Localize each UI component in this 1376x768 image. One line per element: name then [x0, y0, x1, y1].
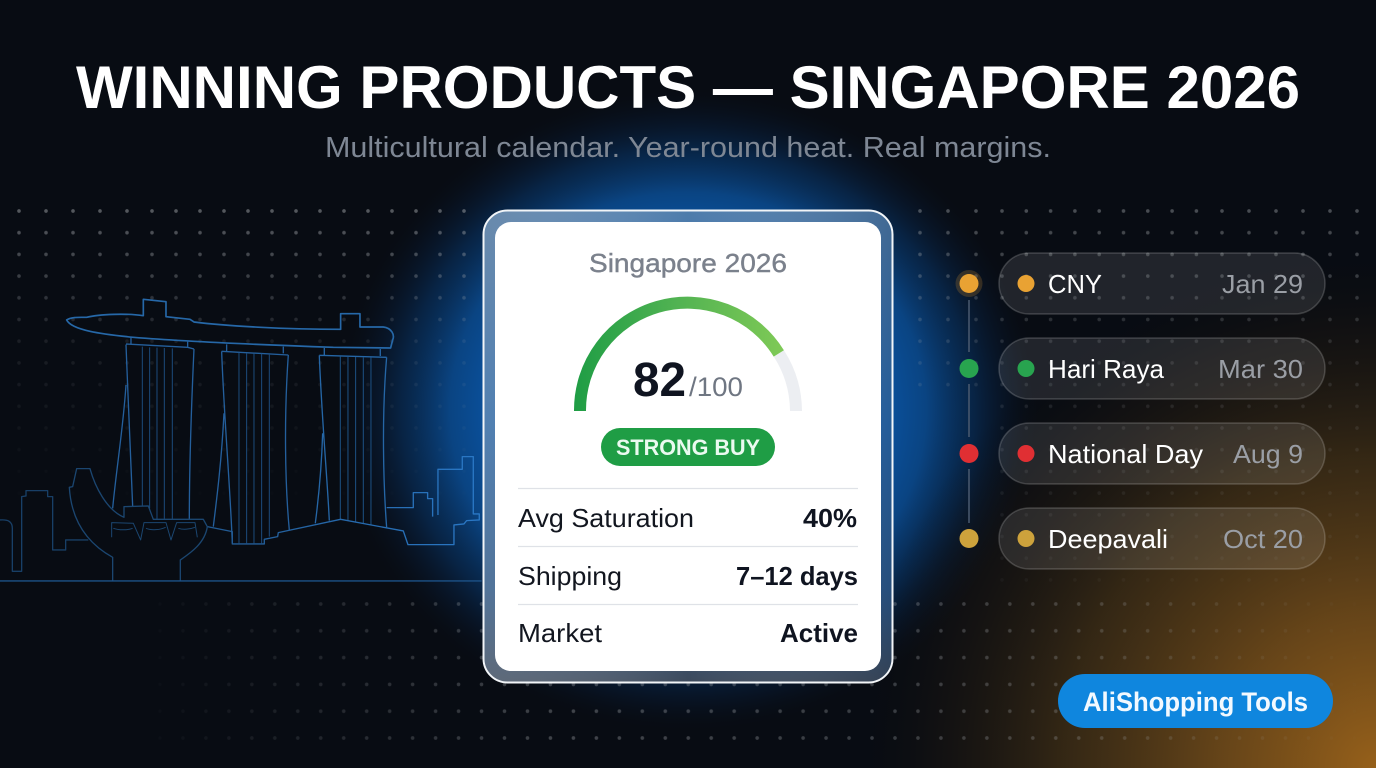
- event: CNY: Jan 29: [1222, 269, 1303, 299]
- event: Hari Raya: Hari Raya: [1048, 354, 1165, 384]
- event: Deepavali: [999, 508, 1325, 569]
- metric: average saturation: 40%: [803, 503, 857, 533]
- metric: shipping: Shipping: [518, 561, 622, 591]
- event: Deepavali: Oct 20: [1223, 524, 1303, 554]
- metric: market: Active: [780, 618, 858, 648]
- metric: market: Market: [518, 618, 603, 648]
- gauge chart: 82 of 100: [580, 303, 796, 411]
- brand badge: [1058, 674, 1333, 728]
- gauge score: /100: [689, 372, 743, 402]
- metric: market: [518, 618, 858, 648]
- title: WINNING PRODUCTS — SINGAPORE 2026: [76, 54, 1300, 121]
- Marina Bay Sands skyline illustration: [0, 299, 482, 581]
- rating badge: STRONG BUY: [616, 435, 760, 460]
- gauge score: [633, 354, 743, 407]
- event: CNY: [999, 253, 1325, 314]
- event: National Day: [999, 423, 1325, 484]
- metric: shipping: 7–12 days: [736, 561, 858, 591]
- card heading: Singapore 2026: [589, 248, 787, 278]
- event: National Day: Aug 9: [1233, 439, 1303, 469]
- rating badge: [601, 428, 775, 466]
- event: Hari Raya: [999, 338, 1325, 399]
- dot grid pattern: [0, 205, 1376, 745]
- event: National Day: National Day: [1048, 439, 1203, 469]
- subtitle: Multicultural calendar. Year-round heat. Real margins.: [325, 132, 1051, 164]
- metrics table: [518, 488, 858, 648]
- panel: score card: [484, 210, 892, 682]
- gauge score: 82: [633, 354, 686, 407]
- event: Hari Raya: Mar 30: [1218, 354, 1303, 384]
- brand badge: AliShopping Tools: [1083, 687, 1308, 717]
- festival timeline: [956, 270, 982, 548]
- metric: average saturation: [518, 503, 857, 533]
- event: CNY: CNY: [1048, 269, 1102, 299]
- metric: shipping: [518, 561, 858, 591]
- metric: average saturation: Avg Saturation: [518, 503, 694, 533]
- event: Deepavali: Deepavali: [1048, 524, 1168, 554]
